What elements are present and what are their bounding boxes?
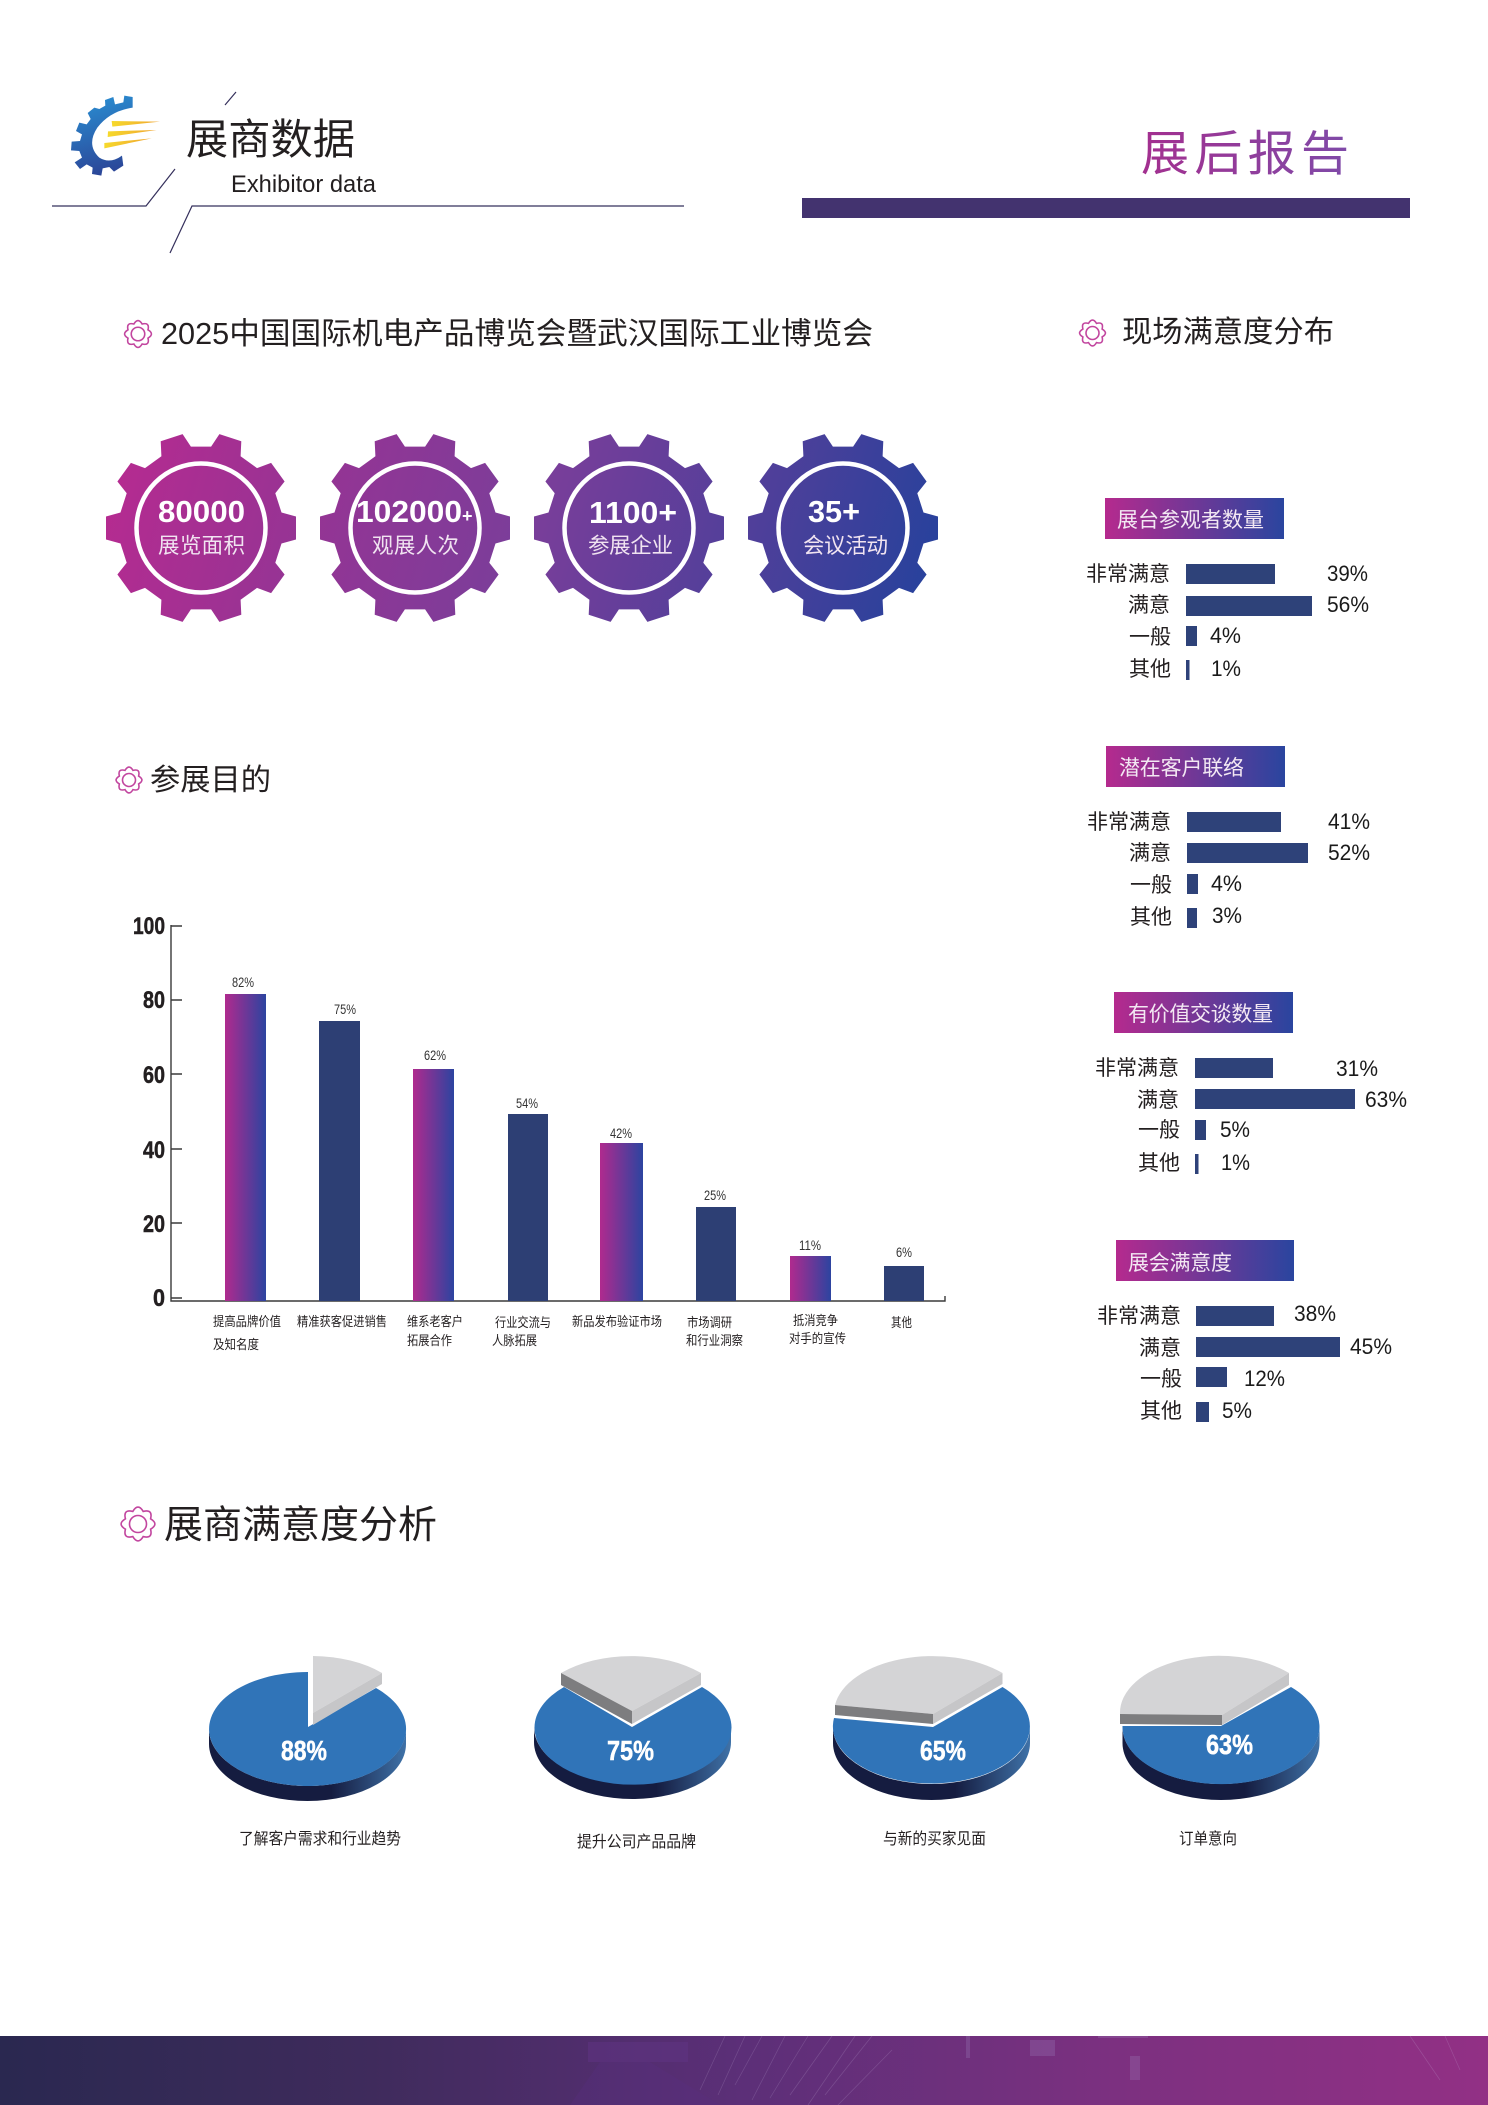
- panel header: [1105, 498, 1284, 539]
- header rule lines: [52, 92, 684, 253]
- stat gear: 80000 exhibition area: [106, 434, 296, 622]
- percent values: 52%: [1328, 840, 1370, 865]
- bar value labels: 75%: [334, 1002, 356, 1017]
- percent values: [1222, 1301, 1392, 1423]
- row labels: [1086, 563, 1171, 681]
- horizontal bars: [1187, 812, 1308, 928]
- bar value labels: 54%: [516, 1096, 538, 1111]
- row labels: [1095, 1057, 1180, 1175]
- pie chart: 75%: 提升公司产品品牌: [577, 1833, 696, 1851]
- heading: 现场满意度分布: 现场满意度分布: [1122, 316, 1334, 349]
- percent values: 5%: [1220, 1117, 1250, 1142]
- chart axes: [171, 925, 945, 1301]
- pie chart: 75%: [534, 1656, 732, 1851]
- percent values: 63%: [1365, 1087, 1407, 1112]
- report title bar: [802, 198, 1410, 218]
- panel: 展台参观者数量: [1086, 498, 1369, 681]
- row labels: 一般: [1130, 874, 1172, 897]
- panel header: [1116, 1240, 1294, 1281]
- percent values: 56%: [1327, 592, 1369, 617]
- heading: expo name: 2025中国国际机电产品博览会暨武汉国际工业博览会: [161, 317, 873, 351]
- panel header: [1114, 992, 1293, 1033]
- stat gear: 35+ conference events: 35+: [808, 494, 860, 529]
- row labels: 非常满意: [1095, 1057, 1179, 1080]
- row labels: 满意: [1128, 594, 1170, 617]
- panel: 展会满意度: [1097, 1240, 1392, 1423]
- panel: key stat gears: [106, 434, 938, 622]
- category labels: 其他: [891, 1315, 912, 1330]
- panel header: [1106, 746, 1285, 787]
- pie chart: 88%: [209, 1656, 406, 1848]
- icon: blue gear logo with yellow streaks: [71, 96, 160, 176]
- category labels: 新品发布验证市场: [572, 1314, 662, 1329]
- panel: 潜在客户联络: [1087, 746, 1370, 929]
- stat gear: 102000+ visitors: [320, 434, 510, 622]
- pie chart: 65%: 与新的买家见面: [883, 1830, 986, 1848]
- stat gear: 102000+ visitors: 102000: [356, 494, 462, 529]
- category labels: 提高品牌价值: [213, 1314, 281, 1329]
- bar value labels: 42%: [610, 1126, 632, 1141]
- row labels: 满意: [1137, 1089, 1179, 1112]
- bar value labels: 11%: [799, 1238, 821, 1253]
- stat gear: 1100+ exhibitors: [534, 434, 724, 622]
- panel: 有价值交谈数量: [1095, 992, 1407, 1175]
- pie chart: 88%: 了解客户需求和行业趋势: [239, 1830, 401, 1848]
- row labels: 非常满意: [1097, 1305, 1181, 1328]
- percent values: 38%: [1294, 1301, 1336, 1326]
- pie chart: 63%: 63%: [1206, 1729, 1253, 1760]
- stat gear: 102000+ visitors: +: [462, 506, 473, 526]
- percent values: 3%: [1212, 903, 1242, 928]
- percent values: [1220, 1056, 1407, 1175]
- row labels: 一般: [1140, 1368, 1182, 1391]
- percent values: 45%: [1350, 1334, 1392, 1359]
- report title: 展后报告: 展后报告: [1141, 128, 1349, 181]
- horizontal bars: [1186, 564, 1312, 680]
- bar chart: exhibiting purposes: [133, 913, 945, 1352]
- category labels: 人脉拓展: [492, 1333, 537, 1348]
- bar value labels: 6%: [896, 1245, 912, 1260]
- row labels: 一般: [1138, 1119, 1180, 1142]
- row labels: [1097, 1305, 1182, 1423]
- axis labels: 0: [153, 1285, 165, 1312]
- axis labels: 60: [143, 1062, 165, 1089]
- axis labels: 20: [143, 1211, 165, 1238]
- row labels: 满意: [1129, 842, 1171, 865]
- row labels: 其他: [1138, 1152, 1180, 1175]
- panel header: 有价值交谈数量: [1128, 1003, 1273, 1026]
- category labels: 市场调研: [687, 1315, 732, 1330]
- bar value labels: 82%: [232, 975, 254, 990]
- heading: 参展目的: 参展目的: [150, 764, 271, 797]
- axis labels: 100: [133, 913, 165, 940]
- row labels: 满意: [1139, 1337, 1181, 1360]
- percent values: 4%: [1211, 871, 1242, 896]
- stat gear: 102000+ visitors: 观展人次: [372, 534, 459, 558]
- row labels: 其他: [1130, 906, 1172, 929]
- percent values: 12%: [1244, 1366, 1285, 1391]
- heading: 展商数据: 展商数据: [186, 116, 355, 163]
- category labels: 及知名度: [213, 1337, 259, 1352]
- header: section title with logo: [52, 92, 684, 253]
- row labels: 一般: [1129, 626, 1171, 649]
- axis labels: 40: [143, 1137, 165, 1164]
- axis labels: 80: [143, 987, 165, 1014]
- category labels: 和行业洞察: [686, 1333, 743, 1348]
- axis labels: [133, 913, 165, 1312]
- category labels: 抵消竞争: [793, 1313, 838, 1328]
- subheading: Exhibitor data: Exhibitor data: [231, 171, 377, 198]
- category labels: 拓展合作: [407, 1333, 452, 1348]
- pie chart: 63%: 订单意向: [1179, 1829, 1237, 1848]
- bars: [225, 994, 924, 1301]
- percent values: 41%: [1328, 809, 1370, 834]
- panel header: 展会满意度: [1128, 1252, 1232, 1275]
- horizontal bars: [1195, 1058, 1355, 1174]
- stat gear: 80000 exhibition area: 展览面积: [158, 534, 245, 558]
- row labels: 非常满意: [1087, 811, 1171, 834]
- stat gear: 80000 exhibition area: 80000: [158, 494, 245, 529]
- pie chart: 75%: 75%: [607, 1735, 654, 1766]
- panel header: 展台参观者数量: [1117, 509, 1264, 532]
- bar value labels: [232, 975, 912, 1260]
- stat gear: 1100+ exhibitors: 参展企业: [588, 534, 673, 558]
- percent values: [1210, 561, 1369, 681]
- percent values: 4%: [1210, 623, 1241, 648]
- stat gear: 35+ conference events: [748, 434, 938, 622]
- pie chart: 65%: [833, 1656, 1030, 1848]
- pie chart: 88%: 88%: [281, 1735, 327, 1766]
- panel header: 潜在客户联络: [1119, 757, 1244, 780]
- category labels: 行业交流与: [495, 1315, 551, 1330]
- percent values: 39%: [1327, 561, 1368, 586]
- heading: 展商满意度分析: 展商满意度分析: [164, 1504, 437, 1547]
- percent values: 1%: [1211, 656, 1241, 681]
- category labels: 精准获客促进销售: [297, 1314, 387, 1329]
- pie chart: 63%: [1120, 1656, 1320, 1848]
- category labels: 对手的宣传: [789, 1331, 846, 1346]
- percent values: 31%: [1336, 1056, 1378, 1081]
- percent values: 5%: [1222, 1398, 1252, 1423]
- row labels: 其他: [1140, 1400, 1182, 1423]
- category labels: 维系老客户: [407, 1314, 463, 1329]
- bar value labels: 62%: [424, 1048, 446, 1063]
- category labels: [213, 1313, 912, 1352]
- horizontal bars: [1196, 1306, 1340, 1422]
- percent values: 1%: [1221, 1150, 1250, 1175]
- bar value labels: 25%: [704, 1188, 726, 1203]
- footer band: [0, 2036, 1488, 2105]
- percent values: [1211, 809, 1370, 928]
- row labels: 其他: [1129, 658, 1171, 681]
- pie chart: 65%: 65%: [920, 1735, 966, 1766]
- row labels: 非常满意: [1086, 563, 1170, 586]
- stat gear: 35+ conference events: 会议活动: [803, 534, 888, 558]
- row labels: [1087, 811, 1172, 929]
- stat gear: 1100+ exhibitors: 1100+: [589, 495, 677, 530]
